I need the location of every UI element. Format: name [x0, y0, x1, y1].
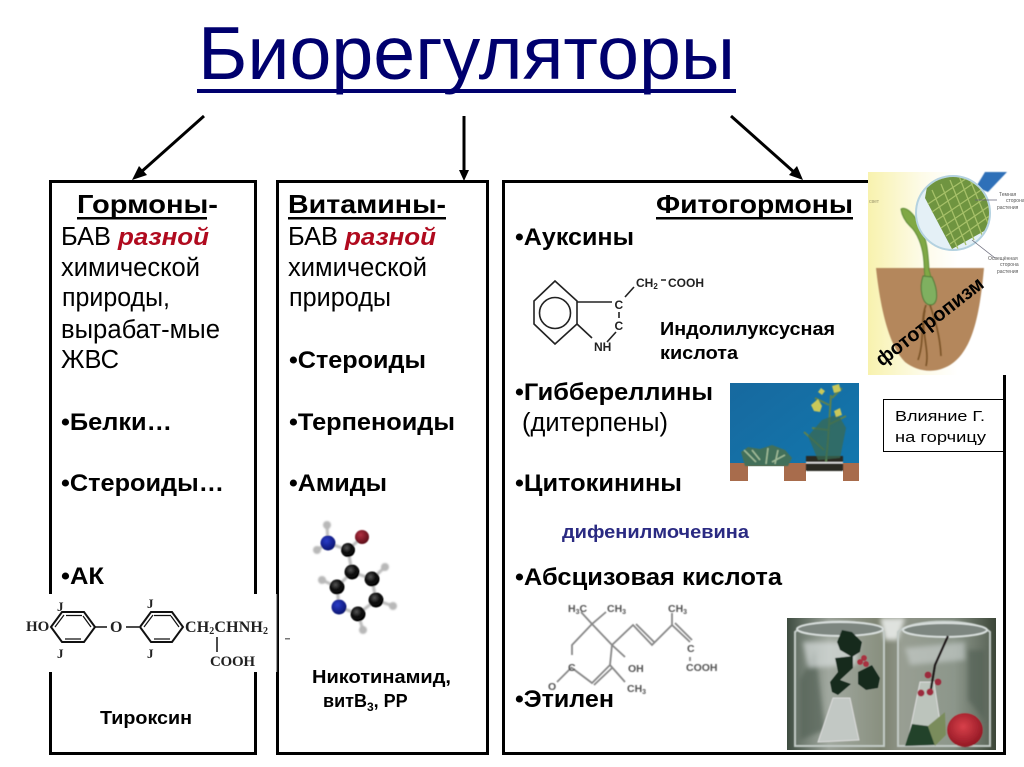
chemical structure: abscisic acid: C	[687, 643, 695, 655]
text: hormones description: химической	[61, 254, 200, 282]
panel: hormones	[50, 182, 256, 754]
chemical structure: abscisic acid: C	[580, 603, 588, 615]
label: indoleacetic acid: кислота	[660, 343, 739, 363]
list: phytohormones classes: •Цитокинины	[515, 470, 682, 497]
list: phytohormones classes: •Этилен	[515, 686, 614, 713]
text: vitamins description: химической	[288, 254, 427, 282]
text: vitamins description	[288, 223, 436, 312]
white patch and thyroxine structure: CHNH	[214, 619, 263, 636]
callout: effect on mustard	[884, 400, 1004, 452]
text: hormones description: ЖВС	[61, 346, 119, 374]
photo: phototropism plant	[868, 170, 1024, 375]
list: vitamins classes	[289, 347, 455, 497]
list: vitamins classes: •Стероиды	[289, 347, 426, 374]
text: vitamins description: БАВ	[288, 223, 338, 251]
pot of soil	[876, 268, 984, 371]
chemical structure: indoleacetic acid: 2	[653, 282, 658, 291]
heading: vitamins: Витамины-	[288, 189, 446, 219]
chemical structure: abscisic acid: CH	[627, 683, 642, 695]
right twig	[930, 636, 948, 695]
white patch and thyroxine structure: J	[147, 646, 154, 661]
list: phytohormones classes: •Абсцизовая кислота	[515, 564, 782, 591]
heading: phytohormones: Фитогормоны	[656, 189, 853, 219]
list: hormones classes	[61, 409, 224, 590]
text: hormones description: БАВ	[61, 223, 111, 251]
magnifier	[916, 170, 995, 250]
photo: jars with ethylene effect	[787, 618, 996, 750]
chemical structure: abscisic acid: OH	[628, 663, 644, 675]
label: thyroxine: Тироксин	[100, 708, 192, 728]
arrow: to hormones	[132, 116, 204, 180]
text: hormones description: вырабат-мые	[61, 316, 220, 344]
left holly	[830, 630, 880, 695]
chemical structure: abscisic acid: 3	[683, 609, 687, 616]
white patch and thyroxine structure: J	[57, 646, 64, 661]
title: Биорегуляторы	[198, 11, 735, 95]
white patch and thyroxine structure	[20, 594, 290, 672]
chemical structure: abscisic acid: H	[568, 603, 576, 615]
annotations: Освещённая	[988, 256, 1018, 262]
list: hormones classes: •Стероиды…	[61, 470, 224, 497]
annotations: сторона	[1000, 262, 1019, 268]
label: nicotinamide	[312, 667, 451, 714]
annotations: растения	[997, 269, 1019, 275]
chemical structure: indoleacetic acid: NH	[594, 340, 611, 354]
label: indoleacetic acid	[660, 319, 835, 363]
chemical structure: indoleacetic acid: C	[614, 319, 624, 333]
arrow: to vitamins	[459, 116, 469, 181]
chemical structure: abscisic acid: O	[548, 681, 556, 693]
white patch and thyroxine structure: J	[57, 599, 64, 614]
arrow: to phytohormones	[731, 116, 803, 180]
annotations: растения	[997, 205, 1019, 211]
line remnant below plant photo	[1003, 375, 1006, 383]
white patch and thyroxine structure: O	[110, 619, 122, 636]
list: phytohormones classes	[515, 224, 782, 713]
panel: vitamins	[278, 182, 488, 754]
callout: effect on mustard: Влияние Г.	[895, 408, 985, 425]
label: nicotinamide: Никотинамид,	[312, 667, 451, 687]
chemical structure: abscisic acid: CH	[607, 603, 622, 615]
text: hormones description	[61, 223, 220, 374]
chemical structure: abscisic acid: CH	[668, 603, 683, 615]
text: hormones description: разной	[117, 224, 209, 251]
light beam	[976, 172, 1007, 192]
stem and leaf	[901, 208, 937, 305]
label: diphenylurea: дифенилмочевина	[562, 522, 750, 542]
apple	[947, 713, 983, 747]
list: hormones classes: •АК	[61, 563, 104, 590]
label: phototropism: фототропизм	[872, 273, 988, 371]
chemical structure: abscisic acid	[548, 603, 718, 696]
white patch and thyroxine structure: CH	[185, 619, 209, 636]
chemical structure: abscisic acid: COOH	[686, 662, 718, 674]
list: phytohormones classes: (дитерпены)	[522, 409, 668, 437]
label: indoleacetic acid: Индолилуксусная	[660, 319, 835, 339]
left flask	[818, 698, 859, 742]
text: vitamins description: природы	[289, 284, 391, 312]
chemical structure: indoleacetic acid: C	[614, 298, 624, 312]
white patch and thyroxine structure: 2	[209, 626, 214, 637]
annotations	[869, 192, 1024, 275]
chemical structure: indoleacetic acid: COOH	[668, 276, 704, 290]
white patch and thyroxine structure: 2	[263, 626, 268, 637]
heading: hormones: Гормоны-	[77, 189, 218, 219]
chemical structure: abscisic acid: 3	[642, 689, 646, 696]
left jar	[795, 622, 884, 746]
list: vitamins classes: •Амиды	[289, 470, 387, 497]
label: nicotinamide: , РР	[374, 691, 408, 711]
white patch and thyroxine structure: COOH	[210, 654, 255, 670]
panel border repair beside callout	[1003, 383, 1006, 753]
annotations: свет	[869, 199, 880, 205]
white patch and thyroxine structure: HO	[26, 619, 49, 635]
roots	[918, 305, 941, 366]
chemical structure: indoleacetic acid: CH	[636, 276, 653, 290]
chemical structure: abscisic acid: 3	[622, 609, 626, 616]
list: phytohormones classes: •Гиббереллины	[515, 379, 713, 406]
callout: effect on mustard: на горчицу	[895, 429, 987, 446]
list: phytohormones classes: •Ауксины	[515, 224, 634, 251]
photo: effect of gibberellin on mustard	[730, 383, 859, 481]
list: vitamins classes: •Терпеноиды	[289, 409, 455, 436]
panel: phytohormones	[504, 182, 1004, 754]
chemical structure: abscisic acid: 3	[576, 609, 580, 616]
white patch and thyroxine structure: J	[147, 596, 154, 611]
chemical structure: abscisic acid: C	[568, 662, 576, 674]
annotations: Темная	[999, 192, 1017, 198]
molecule: nicotinamide	[313, 521, 397, 634]
right flask	[908, 680, 940, 734]
label: nicotinamide: 3	[367, 700, 374, 714]
list: hormones classes: •Белки…	[61, 409, 172, 436]
right jar	[898, 622, 990, 746]
text: vitamins description: разной	[344, 224, 436, 251]
right leaves	[905, 724, 935, 746]
label: nicotinamide: витВ	[323, 691, 367, 711]
chemical structure: indoleacetic acid	[534, 276, 704, 354]
text: hormones description: природы,	[62, 284, 170, 312]
